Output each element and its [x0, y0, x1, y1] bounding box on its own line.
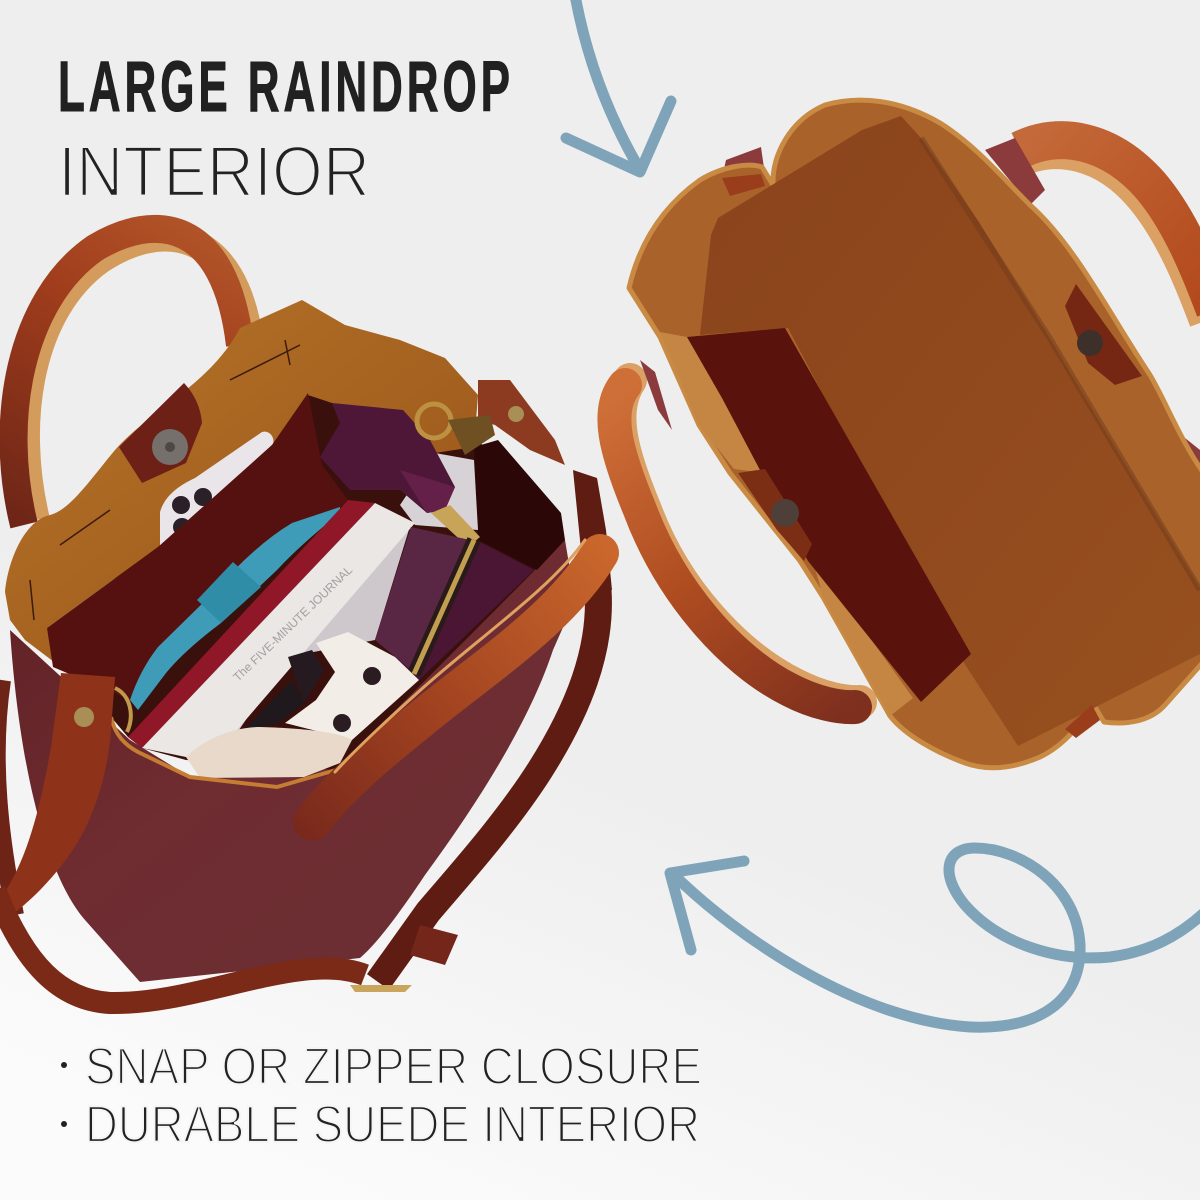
- blue strap: [130, 507, 340, 710]
- phone: [160, 432, 273, 548]
- feature list: [61, 1038, 702, 1154]
- felt page behind the tassel: [400, 453, 478, 530]
- suede interior floor: [700, 116, 1200, 746]
- front handle: [312, 540, 600, 822]
- snap tab: [1065, 284, 1142, 385]
- title: INTERIOR: [58, 133, 370, 212]
- suede outer wall: [629, 100, 1200, 768]
- suede interior wall: [5, 300, 478, 668]
- feature list: SNAP OR ZIPPER CLOSURE: [85, 1038, 702, 1096]
- scarf: [241, 632, 419, 740]
- feature list: DURABLE SUEDE INTERIOR: [85, 1096, 700, 1154]
- left strap loop: [0, 673, 131, 920]
- snap tab: [119, 383, 202, 483]
- right handle: [1015, 140, 1200, 320]
- dark leather pocket: [687, 328, 971, 702]
- left bag: open with contents: [0, 229, 612, 1003]
- right inner wall: [474, 440, 565, 570]
- sunglasses case: [186, 727, 352, 778]
- light suede strips beside the pocket: [660, 332, 913, 716]
- red notebook: [128, 500, 375, 748]
- strap ring and hardware: [417, 380, 565, 465]
- title: LARGE RAINDROP: [58, 47, 510, 127]
- handle base tabs: [722, 174, 1100, 738]
- floor stitched seam: [921, 138, 1200, 590]
- tassel: [320, 403, 480, 547]
- title: [58, 47, 510, 212]
- long shoulder strap, lower part: [0, 890, 458, 1003]
- bag body: [10, 540, 575, 982]
- right bag: empty interior seen from above: [614, 100, 1200, 768]
- white journal: [142, 503, 415, 757]
- arrow: top, pointing to the interior view: [566, 0, 671, 172]
- long shoulder strap, upper part: [378, 470, 612, 982]
- arrow: bottom looping, pointing back to the left bag: [670, 848, 1200, 1027]
- front wall rim: [111, 717, 336, 787]
- back strap on the left edge: [0, 680, 15, 915]
- dark leather pocket: [47, 393, 348, 700]
- interior dark cavity: [50, 395, 565, 770]
- grey felt lining: [186, 523, 411, 757]
- suede stitches: [30, 340, 300, 620]
- white journal: The FIVE-MINUTE JOURNAL: [230, 563, 355, 684]
- left handle: [614, 380, 860, 707]
- rear handle: [14, 229, 250, 525]
- snap socket: [738, 469, 812, 561]
- zipper pouch: [375, 527, 534, 680]
- outer handle tabs: [640, 138, 1200, 490]
